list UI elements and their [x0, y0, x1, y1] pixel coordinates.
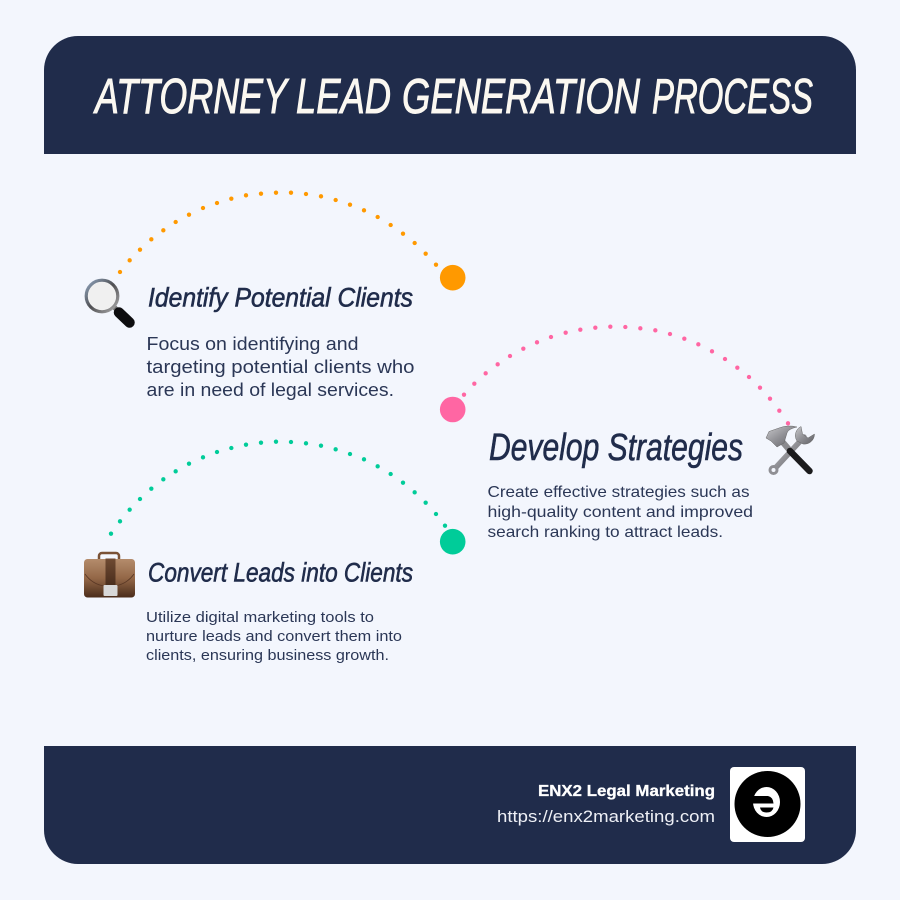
step 2: develop strategies [488, 427, 753, 541]
icon: hammer and wrench [766, 426, 815, 475]
step 1: identify potential clients [146, 282, 414, 400]
description: identify potential clients [146, 334, 414, 400]
heading: identify potential clients: Identify Potential Clients [148, 282, 413, 312]
footer brand name: ENX2 Legal Marketing [538, 783, 715, 800]
footer url: https://enx2marketing.com [497, 807, 715, 826]
description: identify potential clients: are in need of legal services. [146, 380, 394, 400]
description: develop strategies: Create effective strategies such as [488, 484, 750, 501]
footer banner [44, 746, 856, 864]
heading: convert leads into clients: Convert Leads into Clients [148, 558, 413, 588]
title: ATTORNEY [93, 70, 289, 124]
description: develop strategies: high-quality content and improved [488, 504, 753, 521]
icon: magnifying glass [86, 280, 130, 322]
step 1 arc: orange dotted curve with node [118, 190, 466, 291]
description: develop strategies: search ranking to attract leads. [488, 524, 723, 541]
description: develop strategies [488, 484, 753, 541]
logo [730, 767, 805, 842]
header banner [44, 36, 856, 154]
description: identify potential clients: Focus on identifying and [146, 334, 358, 354]
icon: briefcase [84, 553, 135, 598]
description: convert leads into clients [146, 609, 402, 664]
title: LEAD [296, 70, 391, 124]
step 3: convert leads into clients [146, 558, 413, 664]
description: convert leads into clients: Utilize digital marketing tools to [146, 609, 374, 626]
title: PROCESS [652, 70, 813, 124]
description: convert leads into clients: nurture leads and convert them into [146, 628, 402, 645]
title: GENERATION [402, 70, 640, 124]
heading: develop strategies: Develop Strategies [489, 427, 743, 469]
description: identify potential clients: targeting potential clients who [146, 357, 414, 377]
step 3 arc: teal dotted curve with node [109, 439, 466, 554]
description: convert leads into clients: clients, ensuring business growth. [146, 647, 389, 664]
step 2 arc: pink dotted curve with node [440, 324, 790, 425]
title [93, 70, 813, 124]
